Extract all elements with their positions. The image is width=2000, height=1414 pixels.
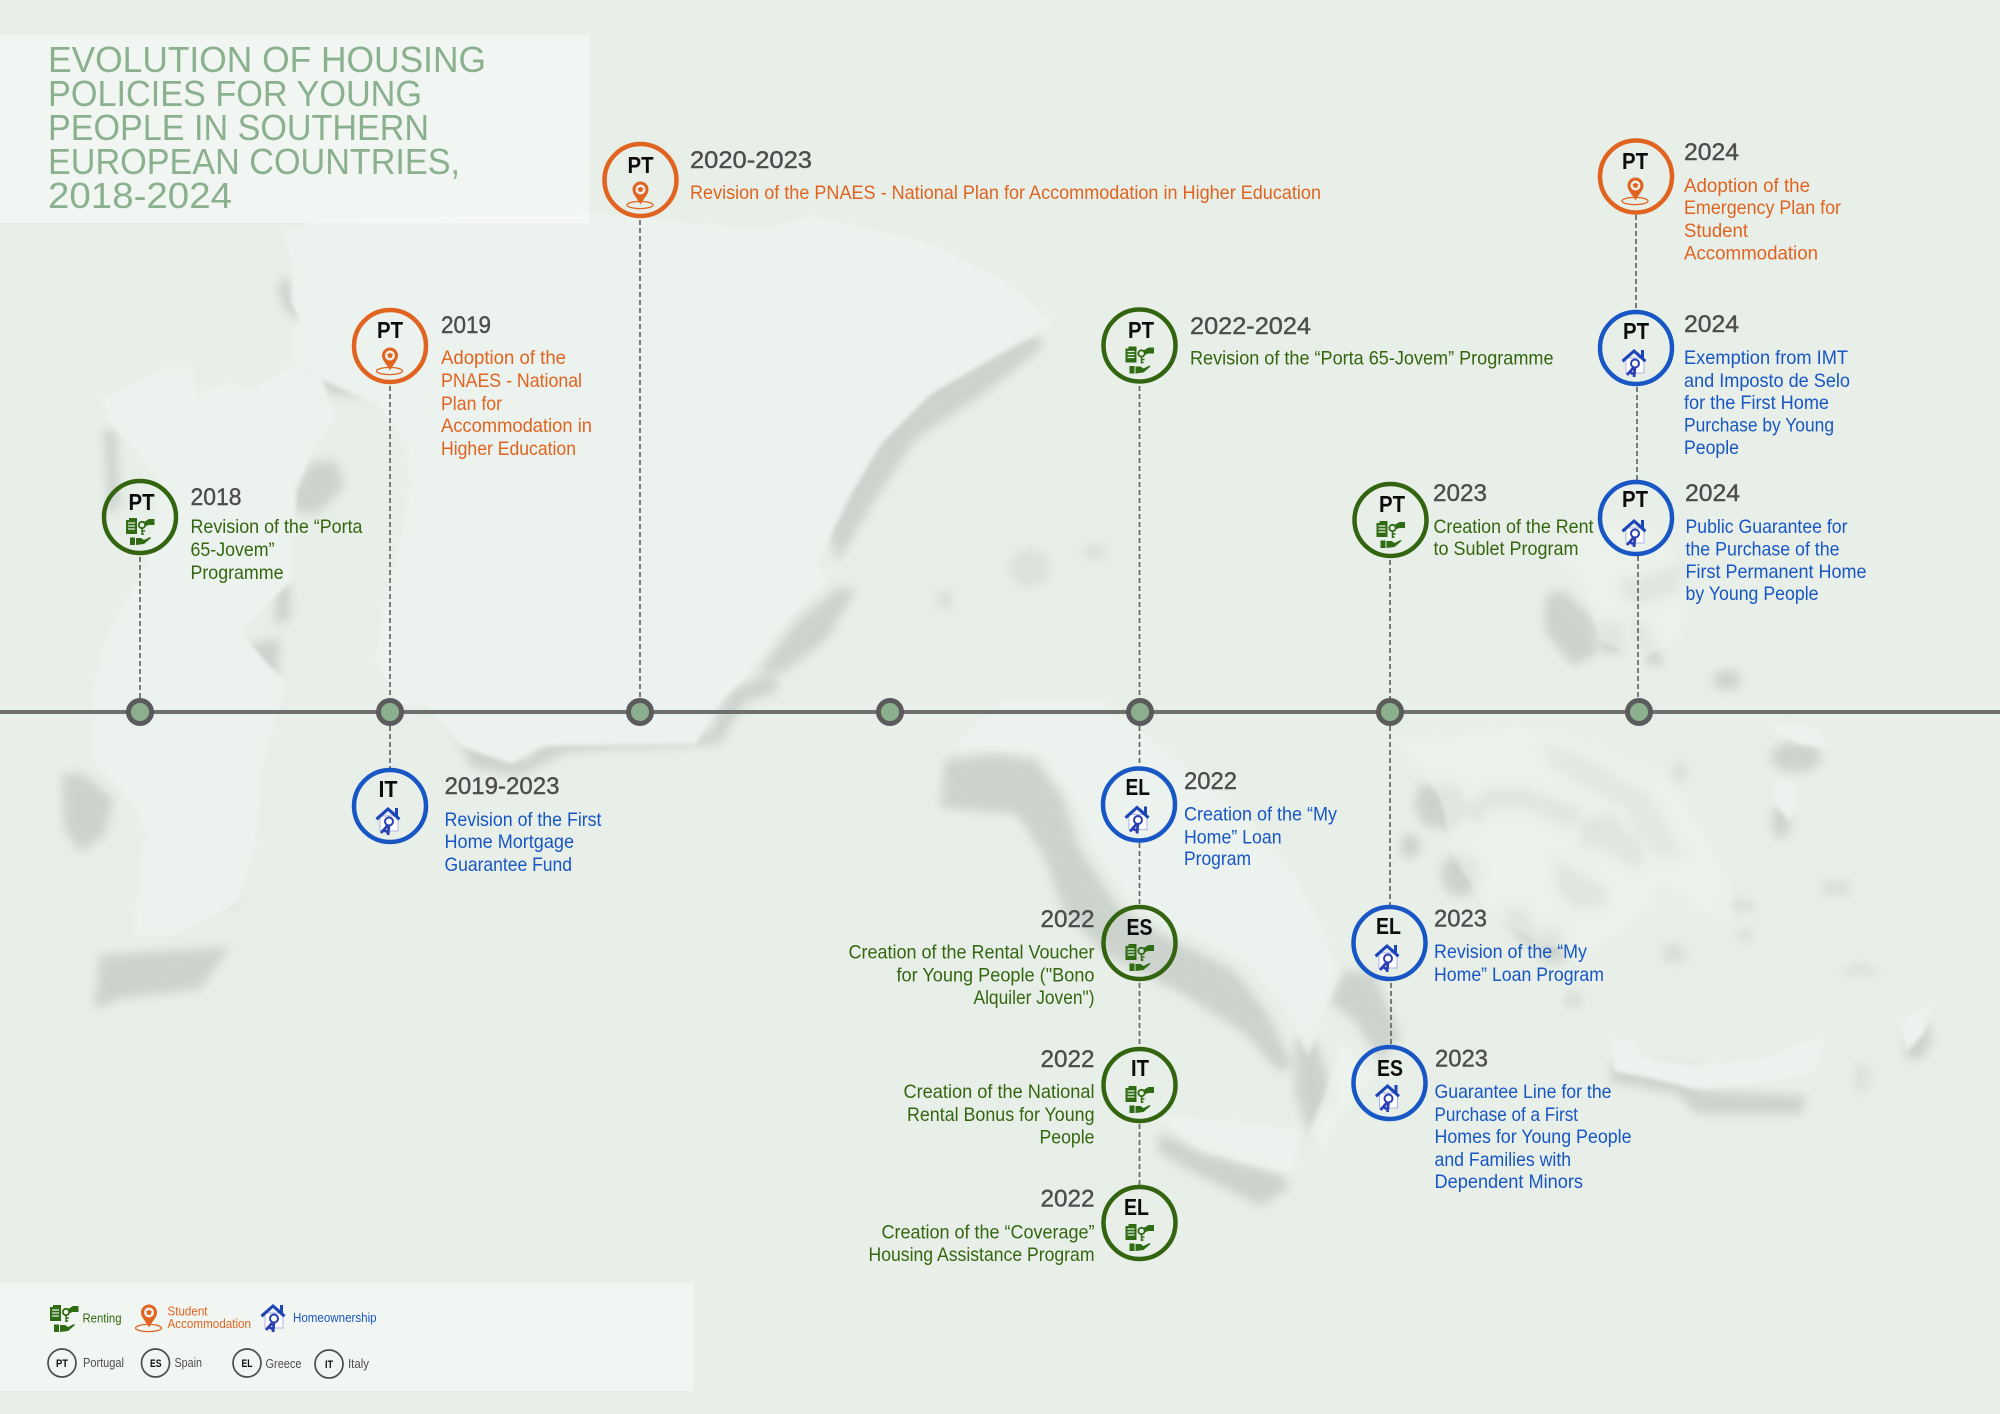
event: 2024 PT IMT exemption: People — [1684, 437, 1739, 459]
timeline nodes — [128, 700, 1650, 724]
legend: Spain: Spain — [174, 1355, 202, 1370]
legend: Italy: Italy — [348, 1356, 369, 1371]
event: 2024 PT emergency plan: 2024 — [1684, 139, 1739, 166]
event: 2018 PT Porta 65-Jovem: PT — [128, 489, 154, 515]
event: 2023 ES guarantee line: 2023 — [1435, 1046, 1488, 1072]
event: 2024 PT IMT exemption: Purchase by Young — [1684, 414, 1834, 436]
event: 2024 PT IMT exemption: for the First Home — [1684, 392, 1829, 414]
legend: Spain: ES — [150, 1358, 162, 1370]
legend: student accommodation: Accommodation — [168, 1317, 251, 1331]
event: 2023 EL My Home revision: 2023 — [1434, 906, 1487, 932]
legend: Greece — [233, 1349, 302, 1377]
title: EUROPEAN COUNTRIES, — [48, 141, 460, 182]
legend: Italy — [315, 1350, 369, 1378]
title: 2018-2024 — [48, 175, 232, 216]
event: 2022 ES rental voucher: Alquiler Joven") — [974, 987, 1094, 1009]
title: PEOPLE IN SOUTHERN — [48, 107, 429, 148]
event: 2022 IT rental bonus: 2022 — [1040, 1046, 1094, 1073]
event: 2022 ES rental voucher: ES — [1126, 914, 1152, 940]
event: 2024 PT public guarantee: the Purchase of the — [1686, 538, 1840, 560]
event: 2019-2023 IT guarantee fund: IT — [378, 776, 398, 802]
event: 2022 IT rental bonus: Creation of the National — [904, 1081, 1094, 1103]
title panel — [0, 35, 589, 223]
event: 2018 PT Porta 65-Jovem — [104, 481, 363, 584]
event: 2019 PT PNAES — [354, 310, 592, 460]
event: 2022 EL My Home loan: Creation of the “My — [1184, 804, 1337, 826]
event: 2019-2023 IT guarantee fund: 2019-2023 — [444, 773, 560, 800]
event: 2024 PT IMT exemption: 2024 — [1684, 311, 1739, 338]
event: 2023 ES guarantee line — [1354, 1046, 1632, 1193]
legend: Portugal: PT — [56, 1358, 68, 1370]
title — [48, 39, 486, 216]
event: 2019 PT PNAES: Accommodation in — [441, 415, 592, 437]
event: 2022 IT rental bonus: People — [1040, 1126, 1094, 1148]
event: 2023 ES guarantee line: Purchase of a First — [1434, 1104, 1579, 1126]
event: 2019-2023 IT guarantee fund: Guarantee Fund — [444, 854, 572, 876]
event: 2020-2023 PT PNAES revision: Revision of the PNAES - National Plan for Accommodation in Higher Education — [690, 182, 1321, 204]
event: 2022 EL coverage: EL — [1124, 1194, 1149, 1220]
event: 2023 PT rent to sublet: Creation of the Rent — [1434, 516, 1594, 538]
legend: homeownership — [260, 1304, 377, 1332]
timeline axis — [0, 710, 2000, 714]
event: 2024 PT public guarantee — [1600, 480, 1866, 605]
event: 2024 PT public guarantee: 2024 — [1685, 480, 1740, 507]
event: 2019 PT PNAES: PNAES - National — [441, 370, 582, 392]
event: 2023 EL My Home revision: EL — [1376, 913, 1401, 939]
event: 2022 EL My Home loan: Program — [1184, 848, 1251, 870]
event: 2019-2023 IT guarantee fund: Home Mortgage — [444, 831, 574, 853]
event: 2018 PT Porta 65-Jovem: Revision of the “Porta — [190, 516, 363, 538]
event: 2020-2023 PT PNAES revision: 2020-2023 — [690, 147, 812, 174]
event: 2024 PT public guarantee: Public Guarantee for — [1686, 516, 1848, 538]
event: 2024 PT IMT exemption — [1600, 311, 1850, 459]
legend: Spain — [142, 1349, 202, 1377]
event: 2022 EL coverage: Housing Assistance Program — [868, 1244, 1094, 1266]
dashed connectors — [140, 215, 1638, 1185]
event: 2022 ES rental voucher: Creation of the Rental Voucher — [848, 942, 1095, 964]
event: 2022 EL coverage: Creation of the “Coverage” — [882, 1222, 1094, 1244]
event: 2022-2024 PT Porta 65: Revision of the “Porta 65-Jovem” Programme — [1190, 348, 1554, 370]
title: EVOLUTION OF HOUSING — [48, 39, 486, 80]
legend: Greece: Greece — [266, 1356, 302, 1371]
event: 2022 ES rental voucher: for Young People ("Bono — [896, 964, 1095, 986]
event: 2019-2023 IT guarantee fund: Revision of the First — [444, 809, 602, 831]
event: 2022 IT rental bonus: Rental Bonus for Young — [907, 1104, 1094, 1126]
event: 2024 PT IMT exemption: and Imposto de Selo — [1684, 370, 1850, 392]
legend: Italy: IT — [325, 1359, 333, 1371]
event: 2022 EL My Home loan — [1103, 768, 1337, 870]
event: 2019 PT PNAES: Plan for — [441, 393, 502, 415]
legend panel — [0, 1283, 693, 1391]
event: 2024 PT emergency plan: Accommodation — [1684, 242, 1818, 264]
event: 2023 EL My Home revision — [1354, 906, 1604, 986]
event: 2024 PT IMT exemption: PT — [1623, 318, 1649, 344]
event: 2023 ES guarantee line: Homes for Young People — [1434, 1126, 1632, 1148]
event: 2022 ES rental voucher: 2022 — [1040, 906, 1094, 933]
legend: Portugal: Portugal — [83, 1355, 124, 1370]
event: 2024 PT public guarantee: by Young People — [1686, 583, 1818, 605]
event: 2023 PT rent to sublet: 2023 — [1433, 480, 1487, 507]
event: 2023 PT rent to sublet: PT — [1379, 491, 1405, 517]
event: 2020-2023 PT PNAES revision: PT — [628, 152, 654, 178]
event: 2024 PT public guarantee: First Permanent Home — [1686, 561, 1866, 583]
map: southern Europe backdrop — [62, 212, 1937, 1206]
event: 2023 PT rent to sublet — [1354, 480, 1594, 560]
event: 2024 PT emergency plan: Student — [1684, 220, 1749, 242]
event: 2024 PT emergency plan: Adoption of the — [1684, 175, 1810, 197]
event: 2022 EL My Home loan: EL — [1126, 774, 1150, 800]
event: 2020-2023 PT PNAES revision — [604, 144, 1321, 216]
event: 2022 EL coverage — [868, 1186, 1176, 1266]
event: 2019 PT PNAES: Adoption of the — [441, 347, 566, 369]
event: 2018 PT Porta 65-Jovem: 65-Jovem” — [190, 539, 274, 561]
legend: renting: Renting — [82, 1312, 122, 1326]
event: 2023 ES guarantee line: Dependent Minors — [1434, 1171, 1583, 1193]
legend: homeownership: Homeownership — [293, 1311, 377, 1325]
event: 2022 EL My Home loan: Home” Loan — [1184, 826, 1282, 848]
legend: Greece: EL — [242, 1358, 253, 1370]
event: 2022-2024 PT Porta 65 — [1104, 310, 1554, 382]
event: 2022 IT rental bonus — [904, 1046, 1176, 1148]
title: POLICIES FOR YOUNG — [48, 73, 422, 114]
event: 2018 PT Porta 65-Jovem: 2018 — [190, 484, 242, 511]
event: 2023 ES guarantee line: and Families with — [1434, 1149, 1571, 1171]
event: 2019 PT PNAES: Higher Education — [441, 438, 576, 460]
legend: student accommodation — [136, 1304, 251, 1332]
event: 2023 EL My Home revision: Revision of the “My — [1434, 941, 1587, 963]
event: 2023 PT rent to sublet: to Sublet Program — [1434, 538, 1578, 560]
event: 2023 ES guarantee line: Guarantee Line for the — [1434, 1081, 1612, 1103]
event: 2019 PT PNAES: PT — [377, 317, 403, 343]
event: 2023 ES guarantee line: ES — [1377, 1055, 1403, 1081]
legend: renting — [50, 1305, 122, 1332]
event: 2024 PT emergency plan — [1600, 139, 1841, 264]
event: 2019 PT PNAES: 2019 — [441, 312, 491, 339]
event: 2024 PT emergency plan: PT — [1622, 148, 1648, 174]
event: 2022 EL coverage: 2022 — [1040, 1186, 1094, 1212]
event: 2024 PT emergency plan: Emergency Plan for — [1684, 197, 1841, 219]
event: 2024 PT public guarantee: PT — [1622, 486, 1648, 512]
event: 2022 IT rental bonus: IT — [1131, 1055, 1149, 1081]
event: 2022-2024 PT Porta 65: 2022-2024 — [1190, 313, 1311, 340]
legend: student accommodation: Student — [168, 1304, 208, 1318]
legend: Portugal — [48, 1349, 124, 1377]
event: 2022 ES rental voucher — [848, 906, 1176, 1009]
event: 2018 PT Porta 65-Jovem: Programme — [190, 562, 284, 584]
event: 2024 PT IMT exemption: Exemption from IMT — [1684, 347, 1848, 369]
event: 2022-2024 PT Porta 65: PT — [1128, 317, 1154, 343]
event: 2022 EL My Home loan: 2022 — [1184, 768, 1237, 795]
event: 2023 EL My Home revision: Home” Loan Program — [1434, 964, 1604, 986]
event: 2019-2023 IT guarantee fund — [354, 770, 602, 876]
